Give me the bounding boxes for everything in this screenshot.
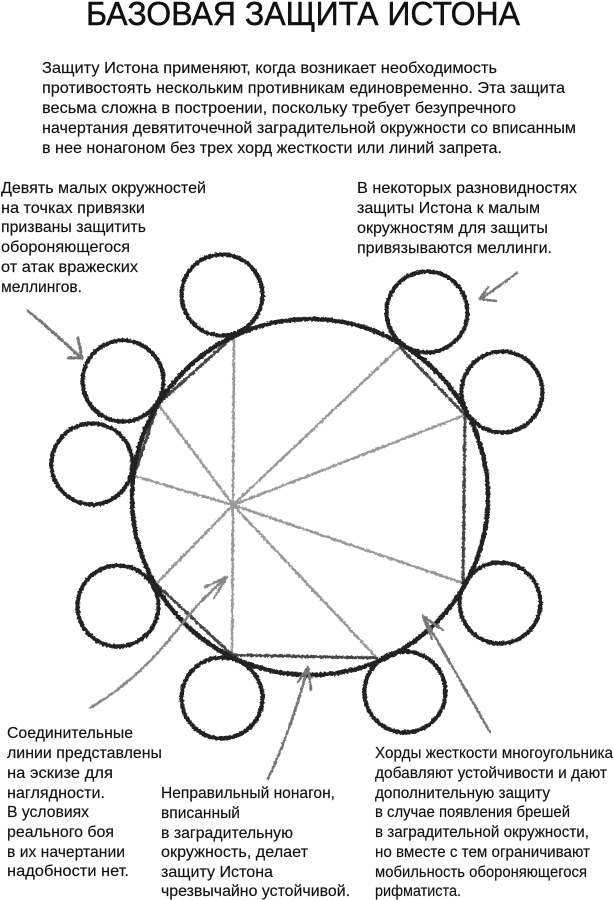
- callout: connecting lines: в их начертании: [7, 844, 125, 861]
- callout: rigidity chords: дополнительную защиту: [375, 785, 550, 802]
- callout: irregular nonagon: в заградительную: [161, 825, 293, 842]
- diagram: nine small circles: [52, 254, 542, 738]
- callout: connecting lines: В условиях: [7, 804, 89, 821]
- callout: irregular nonagon: вписанный: [161, 805, 240, 822]
- intro text block: в нее нонагоном без трех хорд жесткости или линий запрета.: [42, 140, 502, 157]
- callout: rigidity chords: но вместе с тем ограничивают: [375, 844, 591, 861]
- intro text block: противостоять нескольким противникам единовременно. Эта защита: [42, 80, 565, 97]
- intro text block: весьма сложна в построении, поскольку требует безупречного: [42, 100, 516, 117]
- callout: mellings: окружностям для защиты: [357, 220, 548, 237]
- callout: rigidity chords: рифматиста.: [375, 883, 461, 900]
- callout: small circles: на точках привязки: [1, 200, 145, 217]
- callout: mellings: защиты Истона к малым: [357, 200, 540, 217]
- callout: small circles: Девять малых окружностей: [1, 180, 206, 197]
- callout: connecting lines: реального боя: [7, 824, 114, 841]
- callout: rigidity chords: [375, 745, 613, 900]
- callout: connecting lines: Соединительные: [7, 725, 133, 742]
- arrow: to connecting lines: [90, 577, 227, 708]
- callout: mellings: В некоторых разновидностях: [357, 180, 577, 197]
- arrow: to chords: [423, 616, 490, 732]
- callout: mellings: [357, 180, 577, 257]
- intro text block: [42, 60, 576, 157]
- callout: small circles: от атак вражеских: [1, 259, 138, 276]
- callout: connecting lines: надобности нет.: [7, 863, 129, 880]
- callout: irregular nonagon: [161, 785, 350, 900]
- callout: irregular nonagon: окружность, делает: [161, 844, 309, 861]
- callout: irregular nonagon: защиту Истона: [161, 864, 273, 881]
- diagram: nonagon chords: [134, 336, 465, 658]
- callout: connecting lines: наглядности.: [7, 785, 105, 802]
- callout: rigidity chords: добавляют устойчивости и дают: [375, 765, 608, 782]
- callout: irregular nonagon: чрезвычайно устойчивой.: [161, 883, 350, 900]
- callout: rigidity chords: в заградительной окружности,: [375, 824, 589, 841]
- arrow: to nonagon: [268, 667, 311, 779]
- callout: rigidity chords: мобильность обороняющегося: [375, 864, 587, 881]
- arrow: to small circle: [28, 311, 82, 358]
- arrow: to mellings circle: [480, 273, 517, 301]
- intro text block: Защиту Истона применяют, когда возникает необходимость: [42, 60, 497, 77]
- diagram: spokes of the nonagon: [134, 336, 465, 658]
- callout: small circles: меллингов.: [1, 279, 82, 296]
- callout: connecting lines: линии представлены: [7, 745, 162, 762]
- callout: mellings: привязываются меллинги.: [357, 240, 552, 257]
- diagram: large protective circle: [132, 319, 488, 675]
- callout: small circles: призваны защитить: [1, 219, 146, 236]
- callout: connecting lines: [7, 725, 162, 880]
- callout: irregular nonagon: Неправильный нонагон,: [161, 785, 335, 802]
- callout: small circles: [1, 180, 206, 296]
- intro text block: начертания девятиточечной заградительной окружности со вписанным: [42, 120, 576, 137]
- callout: rigidity chords: в случае появления брешей: [375, 804, 570, 821]
- callout: connecting lines: на эскизе для: [7, 765, 113, 782]
- callout: small circles: обороняющегося: [1, 239, 130, 256]
